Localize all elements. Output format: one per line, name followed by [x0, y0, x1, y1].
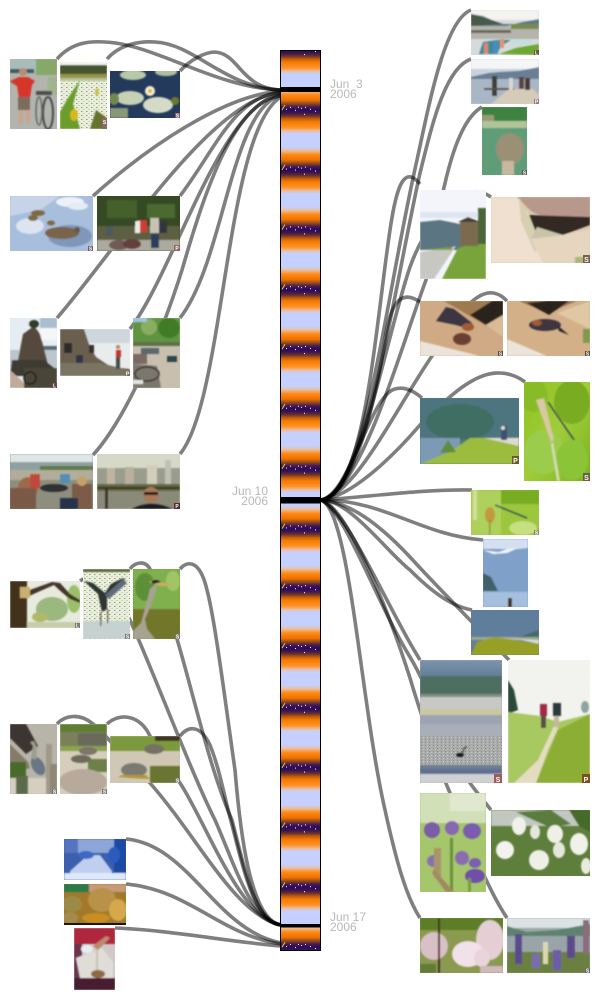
photo: Siwash Rock: L	[53, 384, 56, 390]
photo: group with bikes	[97, 196, 180, 252]
photo: turtles on rocks: S	[103, 790, 107, 796]
photo: men at rock: P	[126, 372, 130, 378]
photo: two hikers on trail	[508, 660, 590, 784]
photo: branch with sign: L	[76, 624, 79, 630]
photo: kayaks on shore: L	[535, 50, 538, 56]
date label: Jun 17	[330, 910, 366, 934]
photo: mountains and post in lake	[483, 539, 528, 607]
date label: Jun 10	[232, 484, 268, 508]
date label: Jun 3: Jun 3	[330, 77, 363, 91]
photo: man in front of city skyline: P	[175, 504, 179, 510]
photo: lookout tower	[420, 190, 486, 279]
connector curves: left lower to Jun 17	[57, 563, 281, 946]
photo: swallow nest on beam	[491, 197, 590, 264]
date label: Jun 10: 2006	[241, 494, 268, 508]
photo: two hikers on trail: P	[584, 777, 589, 784]
photo: white columbines	[491, 810, 590, 876]
photo: heron on post	[10, 724, 57, 796]
photo: kayaks on shore	[471, 10, 539, 56]
date label: Jun 3: 2006	[330, 87, 357, 101]
photo: swallow on beam	[420, 301, 503, 358]
connector curves: left upper to Jun 3	[57, 42, 281, 455]
photo: white water lily on dark pond	[110, 71, 180, 120]
photo: great blue heron portrait: S	[176, 634, 180, 640]
photo: water lilies and iris	[60, 62, 107, 129]
photo: blue gloves in lab	[64, 839, 126, 880]
photo: pink columbine	[420, 918, 503, 973]
photo: man in front of city skyline	[97, 454, 180, 510]
date label: Jun 3	[330, 77, 363, 101]
photo: duck and ducklings: S	[89, 246, 93, 252]
photo: branch with sign	[10, 581, 80, 630]
photo: swallow on beam, second view: S	[586, 352, 590, 358]
photo: group with bikes: P	[175, 246, 179, 252]
photo: men at rock	[60, 329, 130, 378]
photo: hiker on grassy bank	[420, 398, 519, 465]
photo: duck and ducklings	[10, 196, 93, 252]
date label: Jun 17: Jun 17	[330, 910, 366, 924]
photo: damselfly on grass: S	[584, 475, 589, 482]
photo: serving food	[74, 928, 115, 990]
date label: Jun 17: 2006	[330, 920, 357, 934]
photo: pastries	[64, 884, 126, 925]
photo: lupins by the lake: S	[586, 968, 590, 974]
photo: swallow nest on beam: S	[584, 257, 589, 264]
photo: swallow on beam, second view	[507, 301, 590, 358]
photo: Siwash Rock	[10, 318, 57, 390]
photo: swallow on beam: S	[499, 352, 503, 358]
photo: damselfly on grass	[524, 382, 590, 482]
photo: heron taking flight	[83, 569, 130, 640]
photo: turtle on rock: S	[176, 778, 180, 784]
photo: cyclist in red shirt	[10, 59, 57, 129]
photo: lupins by the lake	[507, 918, 590, 974]
date label: Jun 10: Jun 10	[232, 484, 268, 498]
photo: great blue heron portrait	[133, 569, 180, 640]
photo: heron on tidal flats	[420, 660, 502, 784]
photo: hiker on grassy bank: P	[513, 458, 518, 465]
connector curves: right fan from Jun 10	[321, 10, 525, 918]
timeline bar	[280, 50, 321, 950]
photo: heron on tidal flats: S	[496, 777, 501, 784]
photo: bikes on the beach	[133, 318, 180, 388]
photo: turtles on rocks	[60, 724, 107, 796]
photo: osprey nest: S	[523, 170, 527, 176]
photo: water lilies and iris: S	[103, 120, 107, 126]
photo: group on dock	[471, 59, 539, 106]
photo: group on dock: P	[535, 100, 539, 106]
photo: purple columbines	[420, 793, 486, 892]
photo: turtle on rock	[110, 736, 180, 784]
photo: damselfly on sedge	[471, 490, 539, 536]
photo: hazy hill and path	[471, 610, 539, 655]
photo: friends at patio table	[10, 454, 93, 509]
photo: heron on post: S	[53, 790, 57, 796]
photo: damselfly on sedge: S	[535, 530, 539, 536]
photo: osprey nest	[482, 107, 527, 176]
photo: heron taking flight: S	[126, 634, 130, 640]
photo: white water lily on dark pond: S	[176, 114, 180, 120]
